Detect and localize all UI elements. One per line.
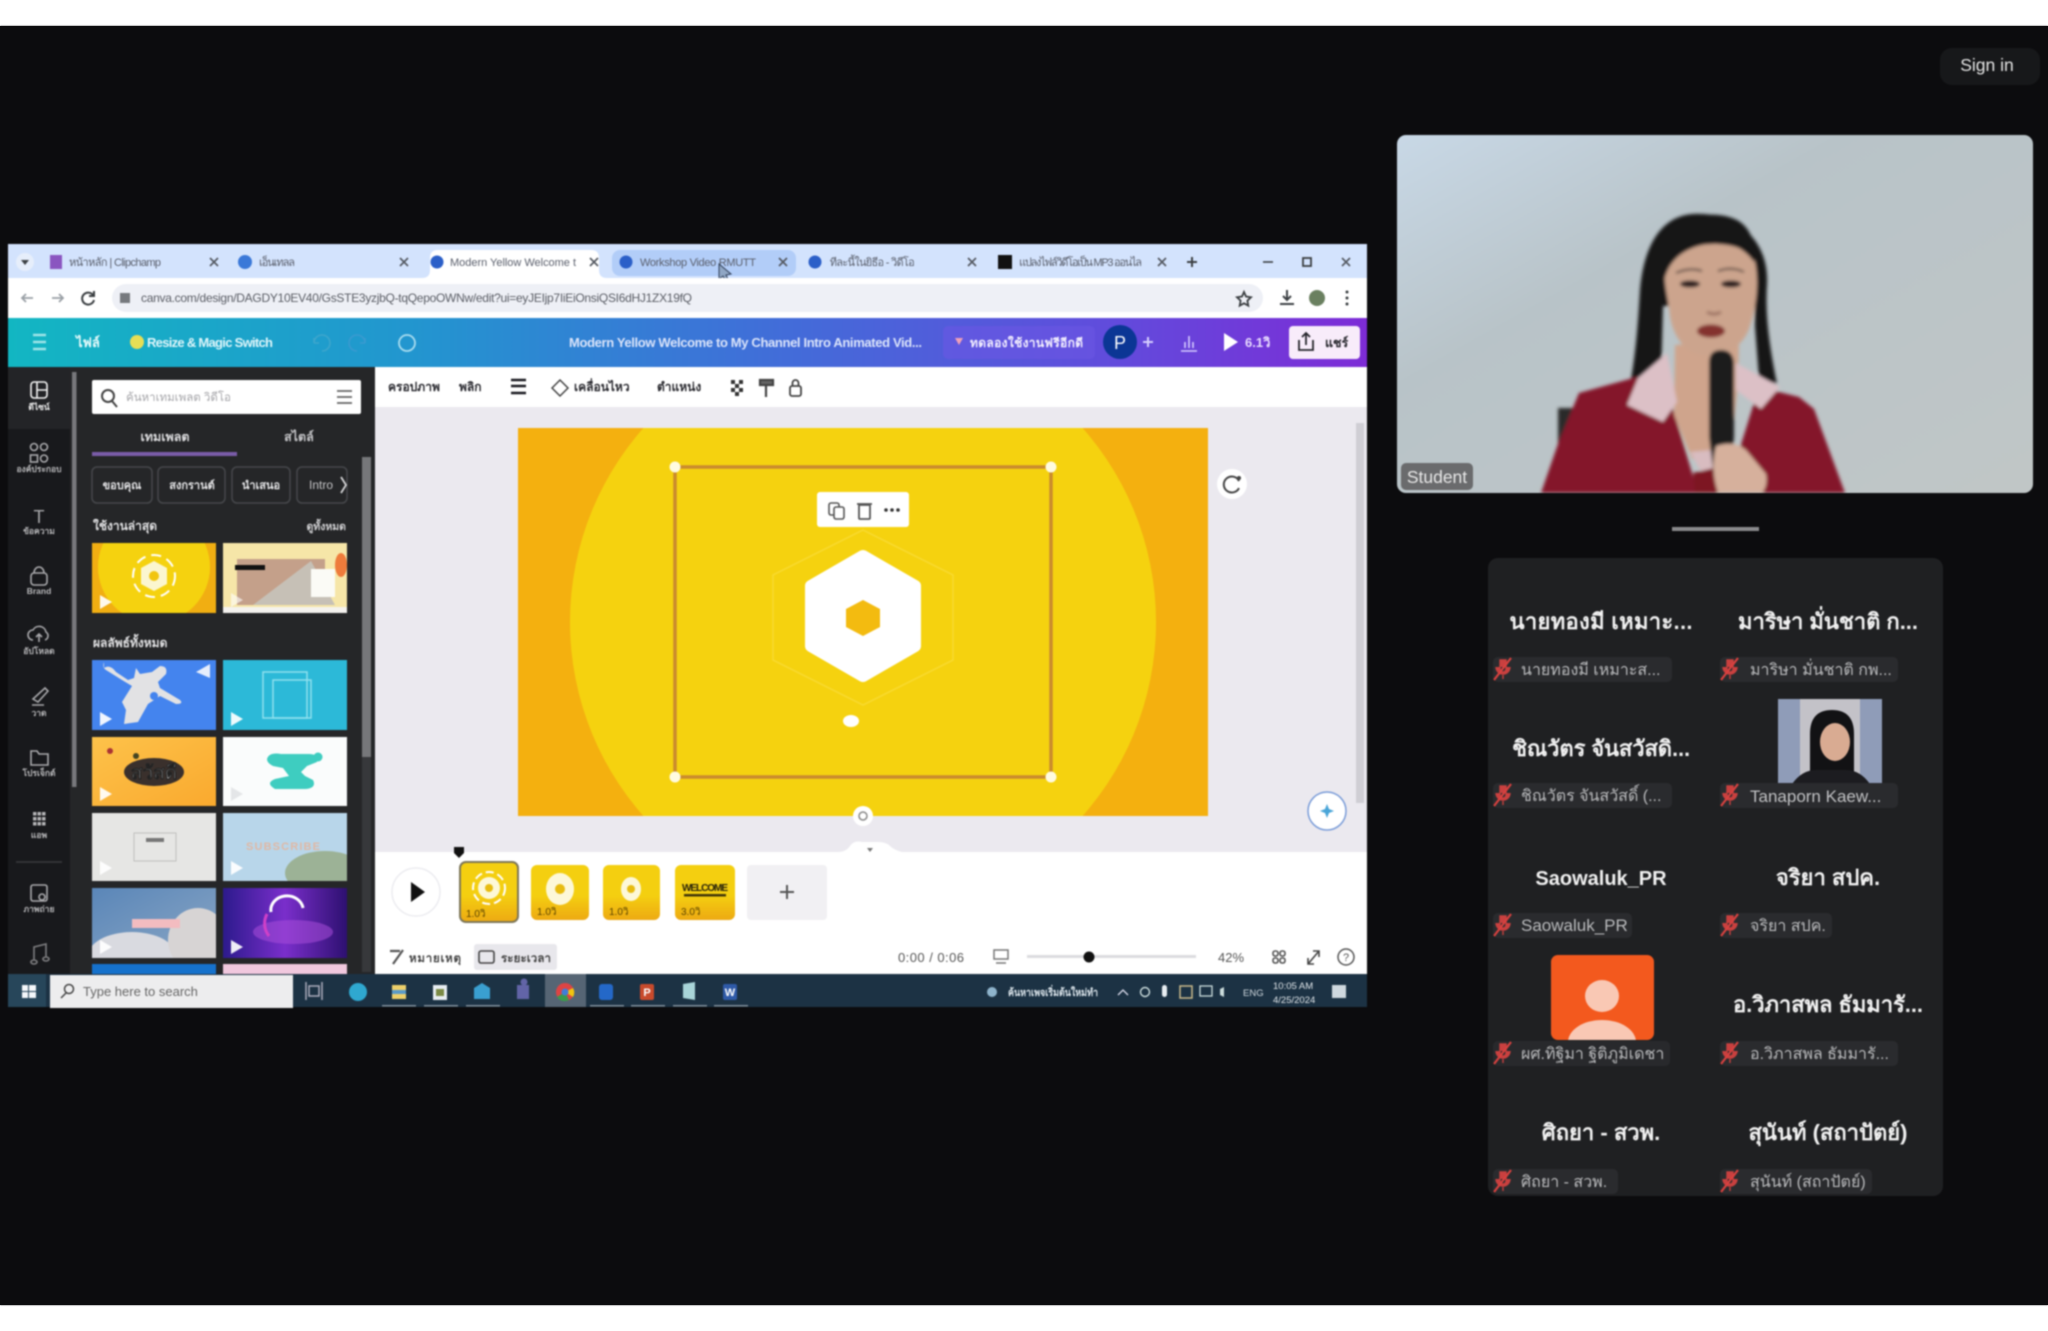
tab: video xyxy=(808,254,976,269)
participant: row 5 right xyxy=(1720,1120,1908,1194)
tab: Clipchamp: หน้าหลัก | Clipchamp xyxy=(69,257,161,269)
tab: Workshop Video hovered: Workshop Video RMUTT xyxy=(640,257,756,269)
browser tab strip xyxy=(8,244,1367,282)
search box: Type here to search xyxy=(83,984,198,999)
share button xyxy=(1289,326,1360,359)
participant: row 4 right: อ.วิภาสพล ธัมมารั... xyxy=(1750,1046,1889,1063)
tab: video: ทีละนี้ในยิธีอ - วิดีโอ xyxy=(830,254,915,269)
tab: Clipchamp xyxy=(50,255,218,269)
mail icon xyxy=(474,983,490,999)
participant: row 4 right: อ.วิภาสพล ธัมมารั... xyxy=(1733,992,1923,1017)
monitor icon xyxy=(994,950,1008,963)
store icon xyxy=(433,985,447,1000)
expand icon xyxy=(1308,951,1319,964)
thumb: collage recent xyxy=(222,542,348,614)
participants gallery panel xyxy=(1488,558,1943,1196)
all results heading: ผลลัพธ์ทั้งหมด xyxy=(93,633,168,650)
playhead marker xyxy=(454,847,464,858)
active indicators xyxy=(382,1005,748,1006)
chair xyxy=(1558,408,1576,444)
scene 4 welcome xyxy=(675,865,735,920)
participant: row 5 left xyxy=(1493,1120,1660,1194)
mouse cursor xyxy=(719,264,731,282)
thumb: orange greeting xyxy=(91,736,217,807)
tab: second xyxy=(238,255,408,269)
speaker figure xyxy=(1539,211,1847,494)
Canva top toolbar: ทดลองใช้งานฟรีอีกดี xyxy=(970,335,1083,350)
participant: row 1 right: มาริษา มั่นชาติ กพ... xyxy=(1750,658,1892,679)
floating element toolbar xyxy=(817,492,909,527)
rail icon: text: T xyxy=(34,507,44,527)
rail icon: photos: ภาพถ่าย xyxy=(24,904,54,914)
magic assistant button xyxy=(1308,792,1346,830)
zoom app icon xyxy=(599,984,613,1000)
participant: row 1 right: มาริษา มั่นชาติ ก... xyxy=(1738,605,1918,634)
scene 3 xyxy=(603,865,660,920)
lips xyxy=(1697,324,1725,338)
hair top xyxy=(1647,215,1754,300)
rail icon: design: ดีไซน์ xyxy=(28,402,50,412)
rail icon: brand xyxy=(27,567,51,596)
share button: แชร์ xyxy=(1325,335,1349,350)
window controls xyxy=(1263,258,1350,266)
participant: Tanaporn with photo: Tanaporn Kaew... xyxy=(1750,787,1881,806)
zoom percent: 42% xyxy=(1218,950,1244,965)
canvas workspace xyxy=(375,407,1367,852)
secondary toolbar: ครอปภาพ xyxy=(388,380,440,394)
Canva top toolbar: P xyxy=(1114,333,1126,353)
sign in button xyxy=(1940,48,2040,85)
filter chips xyxy=(92,467,347,503)
new tab button xyxy=(1187,257,1197,267)
sign in button: Sign in xyxy=(1960,55,2014,75)
thumb: paper grey frame xyxy=(91,812,217,882)
participant: row 5 left: ศิถยา - สวพ. xyxy=(1542,1120,1660,1145)
help icon xyxy=(1338,949,1354,965)
duration button xyxy=(474,944,557,970)
Canva top toolbar xyxy=(8,318,1367,367)
tab: active Modern Yellow xyxy=(422,250,607,278)
thumb: teal frames xyxy=(222,659,348,731)
participant: row 1 right xyxy=(1720,605,1918,682)
collar right xyxy=(1736,363,1780,409)
recent heading: ดูทั้งหมด xyxy=(306,518,346,534)
rail icon: draw xyxy=(31,688,48,718)
hand xyxy=(1713,444,1766,493)
word icon: W xyxy=(725,987,736,999)
tabs xyxy=(92,429,314,456)
duration button: ระยะเวลา xyxy=(501,953,551,965)
thumb: sky subscribe: SUBSCRIBE xyxy=(246,841,320,853)
icon: animate xyxy=(552,380,568,396)
blazer xyxy=(1541,377,1845,493)
faint outlined hexagon xyxy=(773,530,953,705)
selection box xyxy=(670,462,1056,782)
rail icon: photos xyxy=(24,885,54,914)
rail icon: projects: โปรเจ็กต์ xyxy=(21,766,56,778)
collar left xyxy=(1627,353,1677,422)
participant: Tanaporn with photo xyxy=(1720,699,1898,808)
search box xyxy=(92,380,361,414)
Windows taskbar xyxy=(8,974,1367,1008)
participant: orange avatar xyxy=(1493,955,1670,1066)
blazer lower right xyxy=(1693,463,1755,493)
rail icon: uploads: อัปโหลด xyxy=(23,646,55,656)
add scene button xyxy=(747,865,827,920)
participant: row 1 left: นายทองมี เหมาะ... xyxy=(1510,609,1692,634)
time readout: 0:00 / 0:06 xyxy=(898,950,964,965)
secondary toolbar: ตำแหน่ง xyxy=(657,380,701,394)
avatar tile xyxy=(1550,954,1655,1041)
system tray: ค้นหาเพจเริ่มต้นใหม่ทำ xyxy=(1008,984,1098,999)
scene 4 welcome: WELCOME xyxy=(682,883,728,894)
icon: lines xyxy=(511,380,526,393)
notes button xyxy=(390,950,461,966)
participant: row 1 left xyxy=(1493,609,1692,682)
speaker video tile xyxy=(1397,135,2033,493)
powerpoint icon xyxy=(640,984,654,1000)
filter chips: สงกรานต์ xyxy=(169,479,215,492)
yellow circle xyxy=(570,329,1156,915)
filter chips: ขอบคุณ xyxy=(103,480,142,493)
zoom slider xyxy=(1027,952,1196,962)
rail icon: text: ข้อความ xyxy=(23,526,55,536)
Canva top toolbar: Modern Yellow Welcome to My Channel Intro Animated Vid... xyxy=(569,335,922,350)
task view xyxy=(306,982,322,1000)
workspace scrollbar xyxy=(1356,423,1364,803)
icon: transparency xyxy=(731,380,743,396)
neck and chest xyxy=(1674,340,1739,459)
rail icon: projects xyxy=(21,751,56,778)
wall background xyxy=(1397,135,2033,493)
Canva top toolbar: 6.1วิ xyxy=(1245,335,1270,350)
inner blouse xyxy=(1690,449,1724,483)
participant: Saowaluk: Saowaluk_PR xyxy=(1535,868,1667,890)
participant: row 3 right: จริยา สปค. xyxy=(1776,865,1880,890)
Canva template panel xyxy=(70,367,375,980)
teal app icon xyxy=(683,982,695,1000)
rail icon: brand: Brand xyxy=(27,586,51,596)
small white dot xyxy=(843,715,859,727)
rail icon: elements xyxy=(16,444,62,474)
thumb: clouds xyxy=(91,887,217,959)
thumb: purple galaxy xyxy=(222,887,348,959)
start logo xyxy=(22,985,36,998)
secondary toolbar: เคลื่อนไหว xyxy=(574,378,630,394)
rail icon: apps xyxy=(31,812,47,840)
participant: row 3 right xyxy=(1720,865,1880,938)
rail icon: apps: แอพ xyxy=(31,830,47,840)
system tray: ENG xyxy=(1243,988,1264,999)
timeline area xyxy=(375,842,1367,974)
secondary toolbar xyxy=(375,367,1367,407)
play button xyxy=(392,868,440,916)
Canva top toolbar: Resize & Magic Switch xyxy=(147,335,273,350)
system tray: 4/25/2024 xyxy=(1273,995,1315,1006)
shared screen: browser window with Canva editor xyxy=(8,244,1367,1008)
recent heading: ใช้งานล่าสุด xyxy=(93,518,157,534)
system tray: 10:05 AM xyxy=(1273,981,1313,992)
scene 2: 1.0วิ xyxy=(537,907,557,918)
tab: mp3 converter: แปลงไฟล์วิดีโอเป็น MP3 ออนไล xyxy=(1019,255,1142,269)
rotate button xyxy=(1217,469,1247,499)
thumb: orange greeting: สวัสดี xyxy=(131,762,177,784)
eyebrows xyxy=(1676,269,1744,273)
tabs: สไตล์ xyxy=(284,429,314,444)
participant: row 5 right: สุนันท์ (สถาปัตย์) xyxy=(1750,1172,1866,1192)
participant: row 2 left xyxy=(1493,736,1690,808)
tab: mp3 converter xyxy=(998,255,1166,269)
edge icon xyxy=(349,983,367,1001)
tab: active Modern Yellow: Modern Yellow Welcome t xyxy=(450,257,576,269)
inner hexagon xyxy=(846,600,880,636)
thumb: yellow hexagon recent xyxy=(91,542,217,614)
eyes xyxy=(1680,280,1741,288)
participant: row 3 right: จริยา สปค. xyxy=(1750,918,1826,935)
icon: paint roller xyxy=(760,380,773,397)
participant: row 2 left: ชิณวัตร จันสวัสดิ์ (... xyxy=(1521,784,1661,805)
chrome highlighted xyxy=(545,974,586,1007)
address bar xyxy=(8,278,1367,318)
rotate handle bottom xyxy=(853,806,873,826)
recent heading xyxy=(93,518,346,534)
filter chips: นำเสนอ xyxy=(242,479,280,492)
rail icon: draw: วาด xyxy=(31,708,47,718)
powerpoint icon: P xyxy=(643,987,651,999)
rail icon: text xyxy=(23,507,55,536)
participant: row 1 left: นายทองมี เหมาะส... xyxy=(1521,661,1660,679)
help icon: ? xyxy=(1343,952,1349,964)
rail icon: design xyxy=(28,382,50,412)
rail icon: uploads xyxy=(23,626,55,656)
url text: canva.com/design/DAGDY10EV40/GsSTE3yzjbQ-tqQepoOWNw/edit?ui=eyJEIjp7IiEiOnsiQSI6dHJ1ZX19fQ xyxy=(141,291,692,305)
search box xyxy=(50,975,293,1008)
nose shadow xyxy=(1707,312,1721,314)
notes button: หมายเหตุ xyxy=(409,953,461,966)
participant: row 2 left: ชิณวัตร จันสวัสดิ... xyxy=(1512,736,1690,761)
hair back xyxy=(1631,214,1777,384)
participant: Saowaluk: Saowaluk_PR xyxy=(1521,916,1628,935)
icon: lock xyxy=(790,380,801,396)
scene 3: 1.0วิ xyxy=(609,907,629,918)
thumb: sky subscribe xyxy=(222,812,348,882)
design artboard xyxy=(517,427,1209,817)
scene 2 xyxy=(531,865,589,920)
scene 1 xyxy=(460,862,518,922)
scene 4 welcome: 3.0วิ xyxy=(681,907,701,918)
thumb: blue splash xyxy=(91,659,217,731)
thumb row partial xyxy=(92,964,347,974)
system tray xyxy=(987,981,1346,1006)
student name label xyxy=(1401,463,1473,490)
participant: row 5 left: ศิถยา - สวพ. xyxy=(1521,1174,1607,1191)
student name label: Student xyxy=(1407,467,1467,487)
Canva left icon rail xyxy=(8,367,70,974)
participant: Saowaluk xyxy=(1493,868,1667,938)
participant: row 4 right xyxy=(1720,992,1923,1066)
participant photo xyxy=(1777,698,1883,784)
explorer icon xyxy=(392,985,406,999)
rail icon: elements: องค์ประกอบ xyxy=(16,464,62,474)
search box: ค้นหาเทมเพลต วิดีโอ xyxy=(126,390,231,404)
filter chips: Intro xyxy=(309,478,333,492)
thumb: white mint splash xyxy=(222,736,348,807)
white hexagon xyxy=(811,556,915,676)
Canva top toolbar: ไฟล์ xyxy=(74,334,100,350)
teams icon xyxy=(517,978,529,999)
rail icon: music xyxy=(31,944,49,964)
panel collapse tab xyxy=(375,640,385,690)
word icon xyxy=(723,984,737,1000)
scene 1: 1.0วิ xyxy=(466,909,486,920)
tabs: เทมเพลต xyxy=(140,430,190,444)
tab: Workshop Video hovered xyxy=(612,250,796,276)
tab: second: เอ็นเทลล xyxy=(259,255,295,269)
face xyxy=(1665,244,1757,356)
microphone xyxy=(1709,350,1734,477)
grid icon xyxy=(1273,951,1285,963)
participant: orange avatar: ผศ.ทิฐิมา ฐิติภูมิเดชา xyxy=(1521,1046,1664,1064)
participant: row 5 right: สุนันท์ (สถาปัตย์) xyxy=(1748,1120,1908,1147)
secondary toolbar: พลิก xyxy=(459,380,482,394)
resize handle xyxy=(1672,527,1759,531)
timeline collapse tab xyxy=(838,842,902,852)
